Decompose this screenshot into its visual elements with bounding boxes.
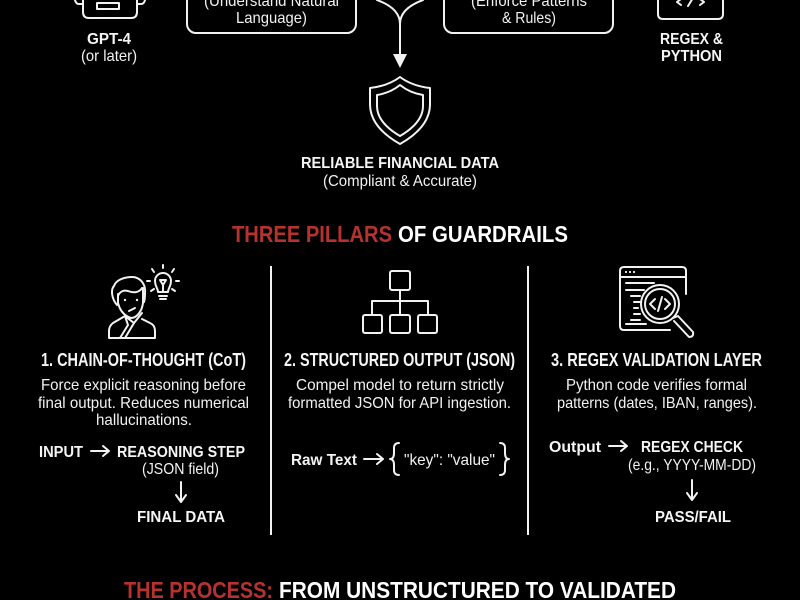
text: chain-of-thought description: Force explicit reasoning before	[41, 377, 246, 394]
text: structured output description	[288, 377, 511, 412]
flow: output to pass/fail: REGEX CHECK	[641, 439, 743, 456]
flow: raw text to json	[291, 443, 509, 475]
text: reliable financial data: RELIABLE FINANCIAL DATA	[301, 155, 499, 172]
text: chain-of-thought description: final output. Reduces numerical	[38, 395, 249, 412]
panel: regex validation	[549, 267, 762, 526]
divider	[527, 266, 529, 535]
box: understand natural language: Language)	[236, 10, 307, 27]
flow: raw text to json: "key": "value"	[404, 452, 495, 469]
text: structured output description: formatted JSON for API ingestion.	[288, 395, 511, 412]
panel: chain-of-thought	[38, 265, 249, 526]
flow: input to final data	[39, 444, 245, 526]
flow: input to final data: INPUT	[39, 444, 83, 461]
icon: hierarchy diagram	[363, 271, 437, 333]
text: reliable financial data: (Compliant & Accurate)	[323, 173, 477, 190]
panel: structured output	[284, 271, 515, 475]
label: regex and python: PYTHON	[661, 48, 722, 65]
icon: regex code window	[658, 0, 723, 19]
heading: chain-of-thought: 1. CHAIN-OF-THOUGHT (CoT)	[41, 350, 246, 370]
text: regex description: Python code verifies formal	[566, 377, 747, 394]
flow: input to final data: REASONING STEP	[117, 444, 245, 461]
flow: output to pass/fail: Output	[549, 439, 602, 456]
flow: input to final data: (JSON field)	[142, 461, 219, 478]
box: enforce patterns and rules	[444, 0, 613, 33]
box: enforce patterns and rules: & Rules)	[502, 10, 556, 27]
heading: structured output: 2. STRUCTURED OUTPUT (JSON)	[284, 350, 515, 370]
flow: output to pass/fail	[549, 439, 756, 526]
text: regex description: patterns (dates, IBAN, ranges).	[557, 395, 757, 412]
label: GPT-4: GPT-4	[87, 31, 131, 48]
divider	[270, 266, 272, 535]
box: understand natural language	[187, 0, 356, 33]
heading: three pillars of guardrails: THREE PILLARS	[232, 221, 392, 247]
flow: raw text to json: Raw Text	[291, 452, 358, 469]
flow: output to pass/fail: PASS/FAIL	[655, 509, 731, 526]
label: regex and python	[660, 31, 723, 65]
heading: the process	[124, 577, 676, 600]
heading: three pillars of guardrails	[232, 221, 568, 247]
heading: three pillars of guardrails: OF GUARDRAILS	[398, 221, 568, 247]
flow: output to pass/fail: (e.g., YYYY-MM-DD)	[628, 457, 756, 474]
text: regex description	[557, 377, 757, 412]
text: chain-of-thought description	[38, 377, 249, 429]
label: GPT-4	[81, 31, 137, 65]
text: reliable financial data	[301, 155, 499, 190]
icon: code window with magnifier	[620, 267, 693, 337]
icon: shield	[370, 77, 430, 144]
arrow: merge to reliable data	[377, 0, 423, 68]
icon: GPT-4 robot	[75, 0, 145, 18]
label: GPT-4: (or later)	[81, 48, 137, 65]
flow: input to final data: FINAL DATA	[137, 509, 225, 526]
icon: thinking person with light bulb	[109, 265, 179, 338]
text: structured output description: Compel model to return strictly	[296, 377, 504, 394]
label: regex and python: REGEX &	[660, 31, 723, 48]
text: chain-of-thought description: hallucinations.	[96, 412, 192, 429]
